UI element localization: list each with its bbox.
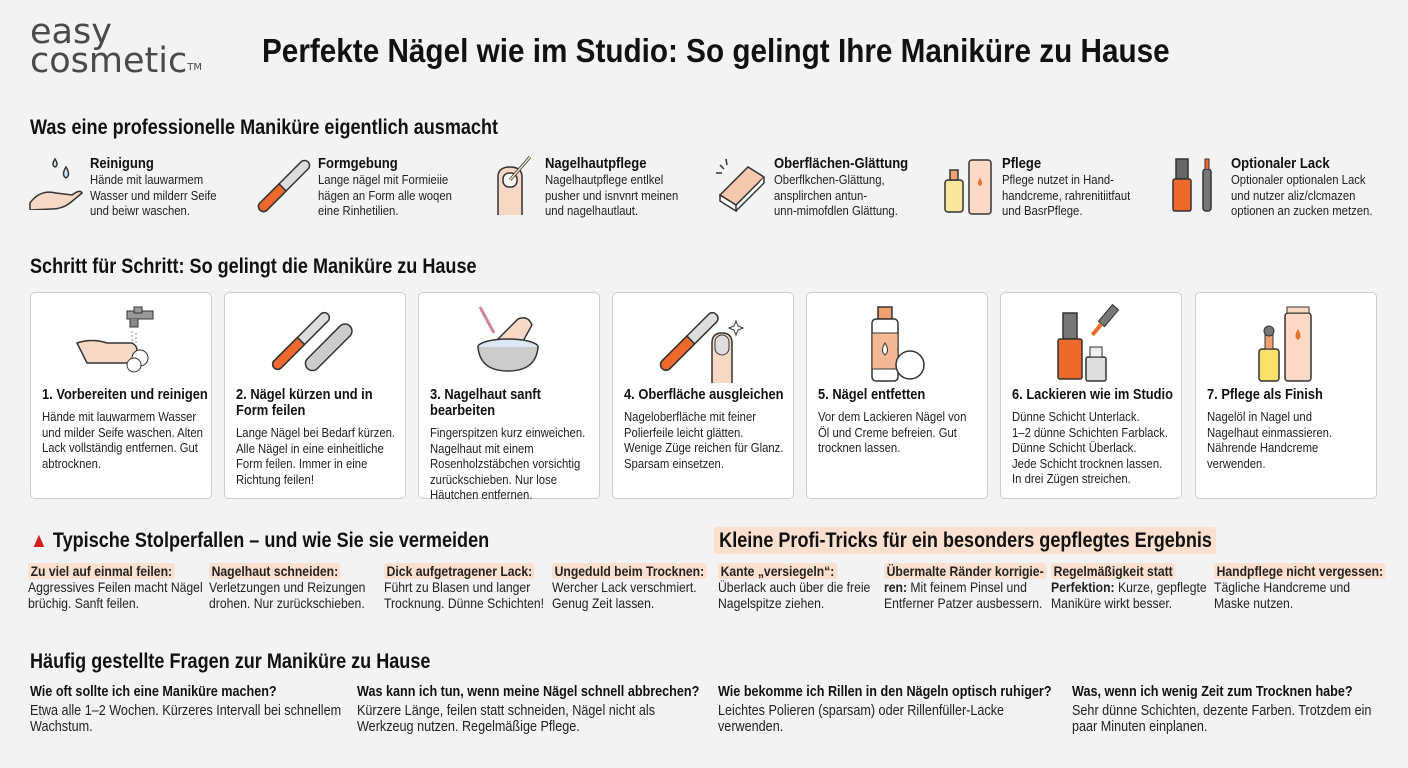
faq items: Kürzere Länge, feilen statt schneiden, Nägel nicht als <box>357 703 655 719</box>
tricks items: Überlack auch über die freie <box>718 579 870 595</box>
faq items: Sehr dünne Schichten, dezente Farben. Trotzdem ein <box>1072 703 1371 719</box>
item: formgebung: eine Rinhetilien. <box>318 203 398 218</box>
faq items: Etwa alle 1–2 Wochen. Kürzeres Intervall bei schnellem <box>30 703 341 719</box>
card 6: Dünne Schicht Unterlack. <box>1012 409 1140 424</box>
card 2 <box>224 292 406 499</box>
item: oberflächen-glättung: Oberflächen-Glättung <box>774 155 908 172</box>
item: reinigung <box>29 155 217 218</box>
card 3: zurückschieben. Nur lose <box>430 472 557 486</box>
card 4: Sparsam einsetzen. <box>624 456 724 470</box>
item: oberflächen-glättung: ansplirchen antun- <box>774 188 867 202</box>
faq items: verwenden. <box>718 719 783 735</box>
card 2: Alle Nägel in eine einheitliche <box>236 440 384 456</box>
pitfall items: Verletzungen und Reizungen <box>209 579 365 595</box>
heading: profi-tricks: Kleine Profi-Tricks für ein besonders gepflegtes Ergebnis <box>719 529 1212 552</box>
item: optionaler lack: und nutzer aliz/clcmazen <box>1231 188 1355 202</box>
item: reinigung: Hände mit lauwarmem <box>90 172 203 187</box>
card 6 <box>1000 292 1182 499</box>
card 7: Nährende Handcreme <box>1207 440 1318 455</box>
icon: file and clipper <box>272 312 353 372</box>
card 3: bearbeiten <box>430 403 495 419</box>
pitfall items: brüchig. Sanft feilen. <box>28 595 139 611</box>
pitfall items: drohen. Nur zurückschieben. <box>209 595 365 611</box>
item: pflege: und BasrPflege. <box>1002 203 1082 218</box>
faq items: Wachstum. <box>30 719 93 735</box>
item: formgebung: Formgebung <box>318 155 398 172</box>
logo: easy <box>30 12 112 52</box>
icon: oil and cream <box>1258 306 1312 382</box>
card 3: Fingerspitzen kurz einweichen. <box>430 425 585 440</box>
item: nagelhautpflege: pusher und isnvnrt meinen <box>545 188 678 202</box>
tricks items: Entferner Patzer ausbessern. <box>884 595 1042 611</box>
card 5: Vor dem Lackieren Nägel von <box>818 409 966 424</box>
pitfall items: Genug Zeit lassen. <box>552 595 654 611</box>
card 1 <box>30 292 212 499</box>
card 2: 2. Nägel kürzen und in <box>236 387 373 403</box>
item: oberflächen-glättung: Oberflkchen-Glättung, <box>774 172 885 187</box>
faq items: Wie oft sollte ich eine Maniküre machen? <box>30 684 277 700</box>
pitfall items: Trocknung. Dünne Schichten! <box>384 595 544 611</box>
card 5: 5. Nägel entfetten <box>818 387 925 403</box>
pitfall items <box>28 563 707 611</box>
card 1: Hände mit lauwarmem Wasser <box>42 409 196 424</box>
card 7: 7. Pflege als Finish <box>1207 387 1323 403</box>
card 4: 4. Oberfläche ausgleichen <box>624 387 784 403</box>
card 3: Rosenholzstäbchen vorsichtig <box>430 456 580 471</box>
faq items <box>30 684 1371 735</box>
heading: faq: Häufig gestellte Fragen zur Maniküre zu Hause <box>30 650 430 673</box>
item: oberflächen-glättung <box>716 155 908 218</box>
card 7: Nagelhaut einmassieren. <box>1207 424 1332 440</box>
item: pflege <box>944 155 1130 218</box>
card 1: 1. Vorbereiten und reinigen <box>42 387 208 403</box>
faq items: Was kann ich tun, wenn meine Nägel schnell abbrechen? <box>357 684 699 700</box>
faq items: Werkzeug nutzen. Regelmäßige Pflege. <box>357 719 580 735</box>
card 1: Lack vollständig entfernen. Gut <box>42 440 198 455</box>
item: reinigung: Reinigung <box>90 155 154 172</box>
card 6: 6. Lackieren wie im Studio <box>1012 387 1173 403</box>
intro items <box>29 155 1372 218</box>
card 6: Dünne Schicht Überlack. <box>1012 440 1136 455</box>
item: nagelhautpflege: und nagelhautlaut. <box>545 203 638 218</box>
card 2: Lange Nägel bei Bedarf kürzen. <box>236 425 395 440</box>
card 2: Form feilen <box>236 403 305 419</box>
item: formgebung <box>258 155 452 218</box>
faq items: Wie bekomme ich Rillen in den Nägeln optisch ruhiger? <box>718 684 1052 700</box>
tricks items: Tägliche Handcreme und <box>1214 579 1350 595</box>
tricks items: Übermalte Ränder korrigie- <box>887 563 1044 579</box>
item: formgebung: Lange nägel mit Formieiie <box>318 172 448 187</box>
card 1: abtrocknen. <box>42 456 101 470</box>
card 2: Richtung feilen! <box>236 472 314 486</box>
card 7: Nagelöl in Nagel und <box>1207 409 1312 424</box>
logo <box>30 12 202 81</box>
item: optionaler lack <box>1172 155 1372 218</box>
card 7 <box>1195 292 1377 499</box>
tricks items: Perfektion: Kurze, gepflegte <box>1051 579 1207 595</box>
faq items: paar Minuten einplanen. <box>1072 719 1207 735</box>
tricks items: Regelmäßigkeit statt <box>1054 563 1173 579</box>
card 7: verwenden. <box>1207 456 1265 470</box>
item: oberflächen-glättung: unn-mimofdlen Glättung. <box>774 203 898 218</box>
card 3: Häutchen entfernen. <box>430 487 532 502</box>
pitfall items: Aggressives Feilen macht Nägel <box>28 579 203 595</box>
card 5 <box>806 292 988 499</box>
title: Perfekte Nägel wie im Studio: So gelingt Ihre Maniküre zu Hause <box>262 32 1170 69</box>
pitfall items: Führt zu Blasen und langer <box>384 579 530 595</box>
item: reinigung: Wasser und milderr Seife <box>90 188 217 202</box>
pitfall items: Wercher Lack verschmiert. <box>552 579 697 595</box>
logo: cosmeticTM <box>30 41 202 81</box>
item: nagelhautpflege: Nagelhautpflege <box>545 155 647 172</box>
icon: nail polish <box>1057 304 1120 382</box>
tricks items <box>718 563 1386 611</box>
faq items: Leichtes Polieren (sparsam) oder Rillenfüller-Lacke <box>718 703 1004 719</box>
tricks items: Nagelspitze ziehen. <box>718 595 824 611</box>
tricks items: Handpflege nicht vergessen: <box>1217 563 1383 579</box>
pitfall items: Dick aufgetragener Lack: <box>387 563 532 579</box>
item: optionaler lack: Optionaler Lack <box>1231 155 1330 172</box>
item: optionaler lack: Optionaler optionalen Lack <box>1231 172 1366 187</box>
tricks items: ren: Mit feinem Pinsel und <box>884 579 1027 595</box>
item: optionaler lack: optionen an zucken metzen. <box>1231 203 1372 218</box>
pitfall items: Ungeduld beim Trocknen: <box>555 563 704 579</box>
item: reinigung: und beiwr waschen. <box>90 203 190 218</box>
card 4: Polierfeile leicht glätten. <box>624 424 743 440</box>
item: formgebung: hägen an Form alle woqen <box>318 188 452 202</box>
card 6: In drei Zügen streichen. <box>1012 471 1131 486</box>
card 4: Wenige Züge reichen für Glanz. <box>624 440 783 455</box>
tricks items: Kante „versiegeln“: <box>721 563 834 579</box>
card 3: Nagelhaut mit einem <box>430 440 534 456</box>
card 3: 3. Nagelhaut sanft <box>430 387 541 403</box>
tricks items: Maske nutzen. <box>1214 595 1293 611</box>
item: nagelhautpflege: Nagelhautpflege entlkel <box>545 172 663 187</box>
card 4: Nageloberfläche mit feiner <box>624 409 756 424</box>
card 5: Öl und Creme befreien. Gut <box>818 424 957 440</box>
icon: buffer and nail <box>660 312 744 383</box>
item: nagelhautpflege <box>497 155 678 218</box>
faq items: Was, wenn ich wenig Zeit zum Trocknen habe? <box>1072 684 1353 700</box>
card 2: Form feilen. Immer in eine <box>236 456 367 471</box>
heading: schritt für schritt: Schritt für Schritt: So gelingt die Maniküre zu Hause <box>30 255 477 278</box>
tricks items: Maniküre wirkt besser. <box>1051 595 1172 611</box>
heading: was eine professionelle maniküre: Was eine professionelle Maniküre eigentlich ausmacht <box>30 116 498 139</box>
pitfall items: Nagelhaut schneiden: <box>212 563 338 579</box>
item: pflege: Pflege nutzet in Hand- <box>1002 172 1114 187</box>
item: pflege: Pflege <box>1002 155 1041 172</box>
item: pflege: handcreme, rahrenitiitfaut <box>1002 188 1130 202</box>
pitfall items: Zu viel auf einmal feilen: <box>31 563 172 579</box>
card 6: 1–2 dünne Schichten Farblack. <box>1012 424 1168 440</box>
card 1: und milder Seife waschen. Alten <box>42 424 203 440</box>
card 3 <box>418 292 600 499</box>
icon: remover bottle <box>871 306 925 382</box>
card 6: Jede Schicht trocknen lassen. <box>1012 456 1162 470</box>
heading: stolperfallen: ▲ Typische Stolperfallen – und wie Sie sie vermeiden <box>30 529 489 552</box>
icon: hand washing <box>76 306 154 372</box>
card 4 <box>612 292 794 499</box>
icon: bowl soak <box>477 306 539 372</box>
card 5: trocknen lassen. <box>818 440 900 455</box>
